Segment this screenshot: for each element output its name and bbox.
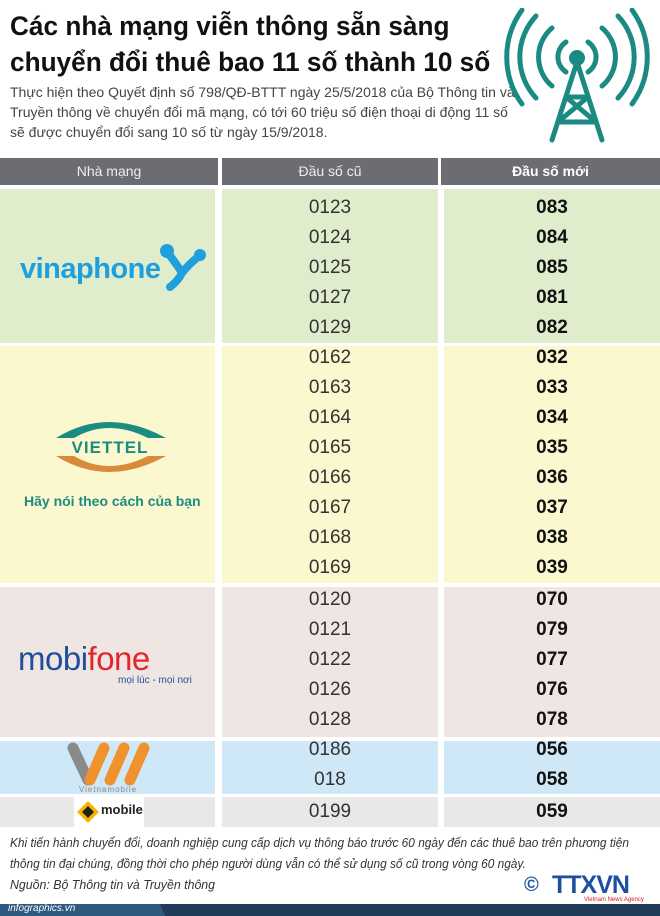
footnote: thông tin đại chúng, đồng thời cho phép người dùng vẫn có thể sử dụng số cũ trong vòng 60 ngày. [10, 857, 526, 871]
logo: gmobile [74, 797, 144, 827]
logo: mobifone [18, 640, 192, 686]
panel: vinaphone: 084 [536, 227, 568, 248]
title [10, 11, 490, 77]
panel: viettel: 0168 [309, 527, 351, 548]
panel: vinaphone: 0127 [309, 287, 351, 308]
title: chuyển đổi thuê bao 11 số thành 10 số [10, 47, 490, 77]
logo: vietnamobile: Vietnamobile [79, 785, 137, 794]
panel: viettel: 0165 [309, 437, 351, 458]
panel: vinaphone: 0129 [309, 317, 351, 338]
source: Nguồn: Bộ Thông tin và Truyền thông [10, 877, 215, 892]
panel: viettel: 033 [536, 377, 568, 398]
panel: vinaphone: 0124 [309, 227, 351, 248]
panel: mobifone: 0122 [309, 649, 351, 670]
panel: gmobile: 059 [536, 801, 568, 822]
panel: mobifone: 078 [536, 709, 568, 730]
panel: viettel: 034 [536, 407, 568, 428]
panel: gmobile: 0199 [309, 801, 351, 822]
panel: viettel [0, 346, 660, 583]
panel: mobifone [0, 587, 660, 737]
panel: mobifone: 070 [536, 589, 568, 610]
logo: viettel: Hãy nói theo cách của bạn [24, 493, 201, 509]
table header: Đầu số mới [512, 163, 589, 179]
panel: mobifone: 079 [536, 619, 568, 640]
panel: vietnamobile [0, 739, 660, 794]
logo: TTXVN: TTXVN [552, 871, 629, 899]
panel: viettel: 0162 [309, 347, 351, 368]
panel: gmobile [0, 797, 660, 827]
logo: viettel [24, 422, 201, 509]
panel: vinaphone: 083 [536, 197, 568, 218]
logo: mobifone: mọi lúc - mọi nơi [118, 675, 192, 686]
panel: vietnamobile: 0186 [309, 739, 351, 760]
table header: Nhà mạng [77, 163, 141, 179]
panel: vinaphone: 0125 [309, 257, 351, 278]
panel: mobifone: 0128 [309, 709, 351, 730]
title: Các nhà mạng viễn thông sẵn sàng [10, 11, 450, 41]
panel: vinaphone: 085 [536, 257, 568, 278]
panel: viettel: 0163 [309, 377, 351, 398]
footnote: Khi tiến hành chuyển đổi, doanh nghiệp cung cấp dịch vụ thông báo trước 60 ngày đến các thuê bao trên phương tiện [10, 836, 629, 850]
panel: vietnamobile: 058 [536, 769, 568, 790]
logo: viettel: VIETTEL [72, 438, 148, 457]
panel: viettel: 036 [536, 467, 568, 488]
panel: viettel: 032 [536, 347, 568, 368]
panel: viettel: 039 [536, 557, 568, 578]
intro text: Thực hiện theo Quyết định số 798/QĐ-BTTT ngày 25/5/2018 của Bộ Thông tin và [10, 84, 515, 100]
panel: viettel: 0169 [309, 557, 351, 578]
table header [0, 158, 660, 185]
panel: viettel: 038 [536, 527, 568, 548]
footer band [0, 904, 660, 916]
panel: viettel: 0166 [309, 467, 351, 488]
panel: vinaphone: 082 [536, 317, 568, 338]
logo: vinaphone [20, 244, 206, 291]
panel: mobifone: 0126 [309, 679, 351, 700]
logo: vinaphone: vinaphone [20, 253, 161, 285]
panel: mobifone: 076 [536, 679, 568, 700]
panel: viettel: 035 [536, 437, 568, 458]
panel: mobifone: 077 [536, 649, 568, 670]
logo: TTXVN [524, 871, 644, 903]
panel: mobifone: 0120 [309, 589, 351, 610]
icon: antenna tower [504, 8, 650, 142]
logo: vietnamobile [68, 742, 150, 794]
panel: viettel: 0167 [309, 497, 351, 518]
panel: vinaphone: 0123 [309, 197, 351, 218]
panel: vietnamobile: 018 [314, 769, 346, 790]
panel: mobifone: 0121 [309, 619, 351, 640]
footnote [10, 836, 629, 871]
logo: gmobile: mobile [101, 802, 143, 817]
intro text: Truyền thông về chuyển đổi mã mạng, có tới 60 triệu số điện thoại di động 11 số [10, 104, 508, 120]
panel: vietnamobile: 056 [536, 739, 568, 760]
panel: viettel: 037 [536, 497, 568, 518]
logo: TTXVN: Vietnam News Agency [584, 897, 644, 903]
logo: mobifone: mobifone [18, 640, 150, 677]
table header: Đầu số cũ [298, 163, 362, 179]
footer band: infographics.vn [8, 903, 75, 914]
panel: vinaphone: 081 [536, 287, 568, 308]
intro text [10, 84, 515, 140]
intro text: sẽ được chuyển đổi sang 10 số từ ngày 15/9/2018. [10, 124, 327, 140]
panel: viettel: 0164 [309, 407, 351, 428]
logo: TTXVN: © [524, 874, 539, 896]
panel: vinaphone [0, 189, 660, 343]
